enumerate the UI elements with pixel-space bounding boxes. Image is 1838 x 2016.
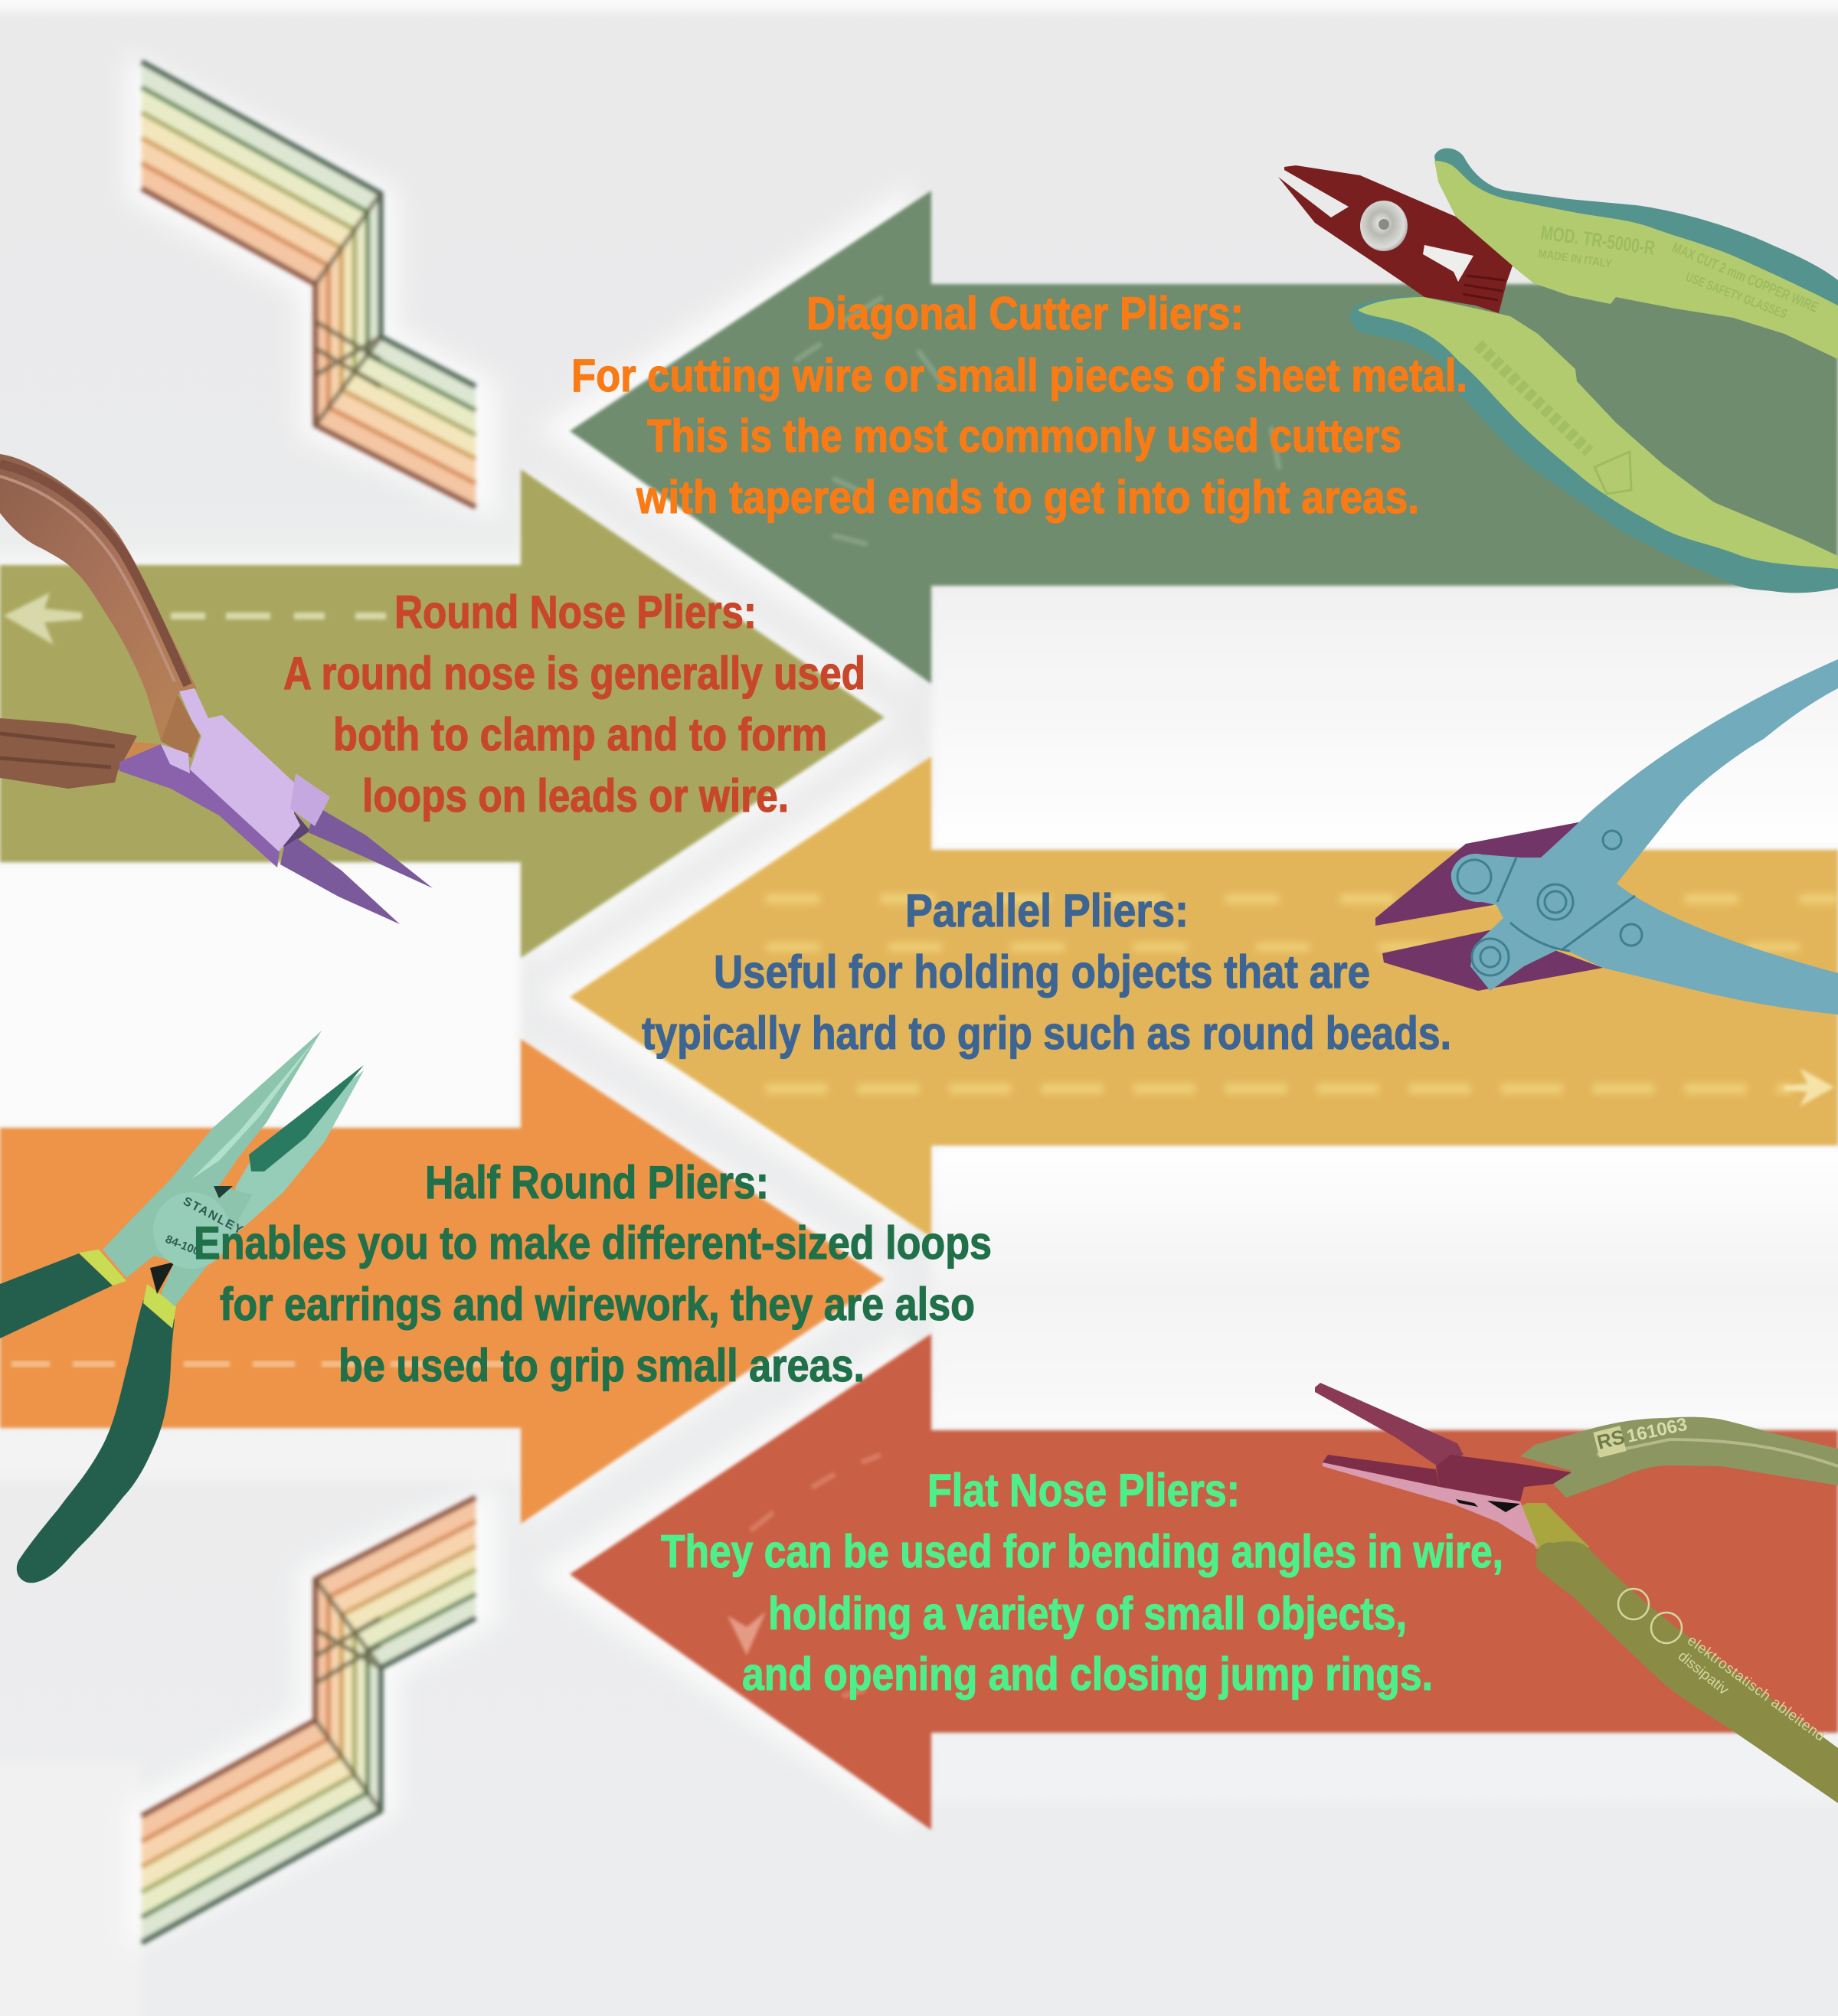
ribbon: top left [142,62,476,507]
text: diagonal cutter pliers [571,288,1467,523]
pliers: half round: 84-100 [164,1233,201,1258]
text: round nose pliers: A round nose is generally used [283,648,865,699]
text: flat nose pliers: and opening and closing jump rings. [742,1648,1433,1700]
pliers: diagonal cutter [1278,149,1838,593]
text: parallel pliers: typically hard to grip such as round beads. [642,1008,1451,1059]
text: flat nose pliers [661,1465,1503,1700]
text: parallel pliers [642,885,1451,1059]
text: round nose pliers: loops on leads or wire. [362,770,789,822]
text: diagonal cutter pliers: with tapered ends to get into tight areas. [636,472,1419,523]
text: round nose pliers [283,587,865,822]
pliers: half round [0,1031,364,1583]
text: diagonal cutter pliers: For cutting wire or small pieces of sheet metal. [571,350,1467,401]
arrow: olive [0,469,885,958]
pliers: diagonal cutter: MOD. TR-5000-R [1539,221,1656,260]
pliers: flat nose [1315,1383,1838,1803]
ribbon: bottom left [142,1498,476,1942]
pliers: diagonal cutter: USE SAFETY GLASSES [1684,270,1789,322]
text: parallel pliers: Parallel Pliers: [905,885,1189,936]
pliers: diagonal cutter: MADE IN ITALY [1537,247,1613,270]
arrow: red [570,1334,1838,1830]
arrow: orange [0,1039,885,1524]
pliers: round nose [0,454,433,924]
text: round nose pliers: Round Nose Pliers: [394,587,757,638]
text: parallel pliers: Useful for holding objects that are [714,946,1370,998]
pliers: parallel [1375,659,1838,1015]
text: diagonal cutter pliers: This is the most commonly used cutters [647,410,1401,462]
pliers: flat nose: RS [1594,1425,1627,1454]
text: half round pliers: for earrings and wirework, they are also [220,1279,975,1330]
text: half round pliers: be used to grip small areas. [338,1340,865,1391]
text: half round pliers: Half Round Pliers: [425,1157,769,1208]
text: round nose pliers: both to clamp and to form [333,709,827,760]
arrow: green [570,191,1838,684]
arrow: yellow [570,756,1838,1237]
pliers: flat nose: elektrostatisch ableitend [1684,1632,1828,1745]
text: flat nose pliers: They can be used for bending angles in wire, [661,1526,1503,1577]
pliers: flat nose: 161063 [1625,1414,1689,1447]
text: flat nose pliers: Flat Nose Pliers: [927,1465,1240,1516]
pliers: half round: STANLEY [181,1195,246,1238]
text: half round pliers: Enables you to make different-sized loops [194,1217,992,1269]
text: flat nose pliers: holding a variety of small objects, [768,1588,1407,1639]
text: diagonal cutter pliers: Diagonal Cutter Pliers: [806,288,1244,339]
pliers: flat nose: dissipativ [1675,1648,1732,1698]
text: half round pliers [194,1157,992,1391]
